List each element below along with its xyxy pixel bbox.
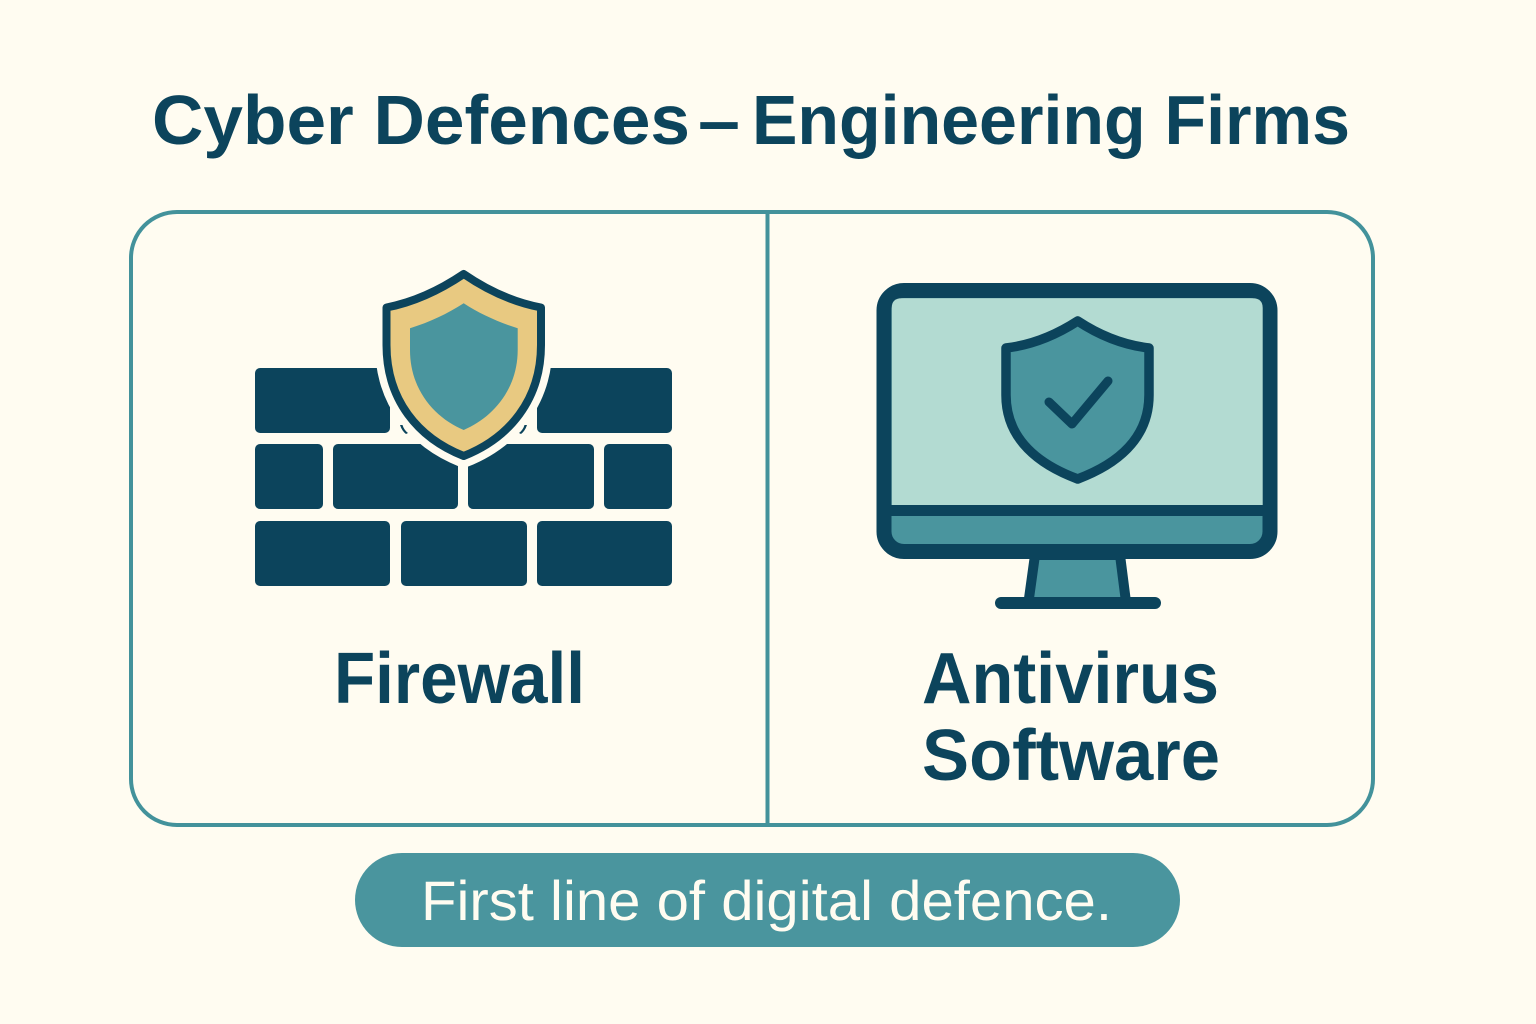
title: Engineering Firms [752,81,1350,159]
screen [892,298,1263,505]
monitor base [995,597,1161,609]
monitor body [884,290,1270,552]
shield halo [386,274,541,456]
callout pill: First line of digital defence. [421,869,1112,932]
screen shield [1006,321,1149,479]
label: Firewall: Firewall [334,639,585,719]
shield centre [410,303,518,430]
label: Antivirus Software: Antivirus [922,639,1219,719]
title: Cyber Defences [152,81,690,159]
callout pill [355,853,1180,947]
icon: firewall brick wall with shield [255,274,672,586]
monitor stand [1028,555,1126,602]
divider bar [891,505,1263,516]
shield [386,274,541,456]
label: Antivirus Software: Software [922,716,1220,796]
check mark [1049,381,1108,424]
title: – [698,81,740,159]
panel: comparison frame [131,212,1373,825]
icon: monitor with shield and check mark [884,290,1270,609]
brick wall [255,368,672,586]
